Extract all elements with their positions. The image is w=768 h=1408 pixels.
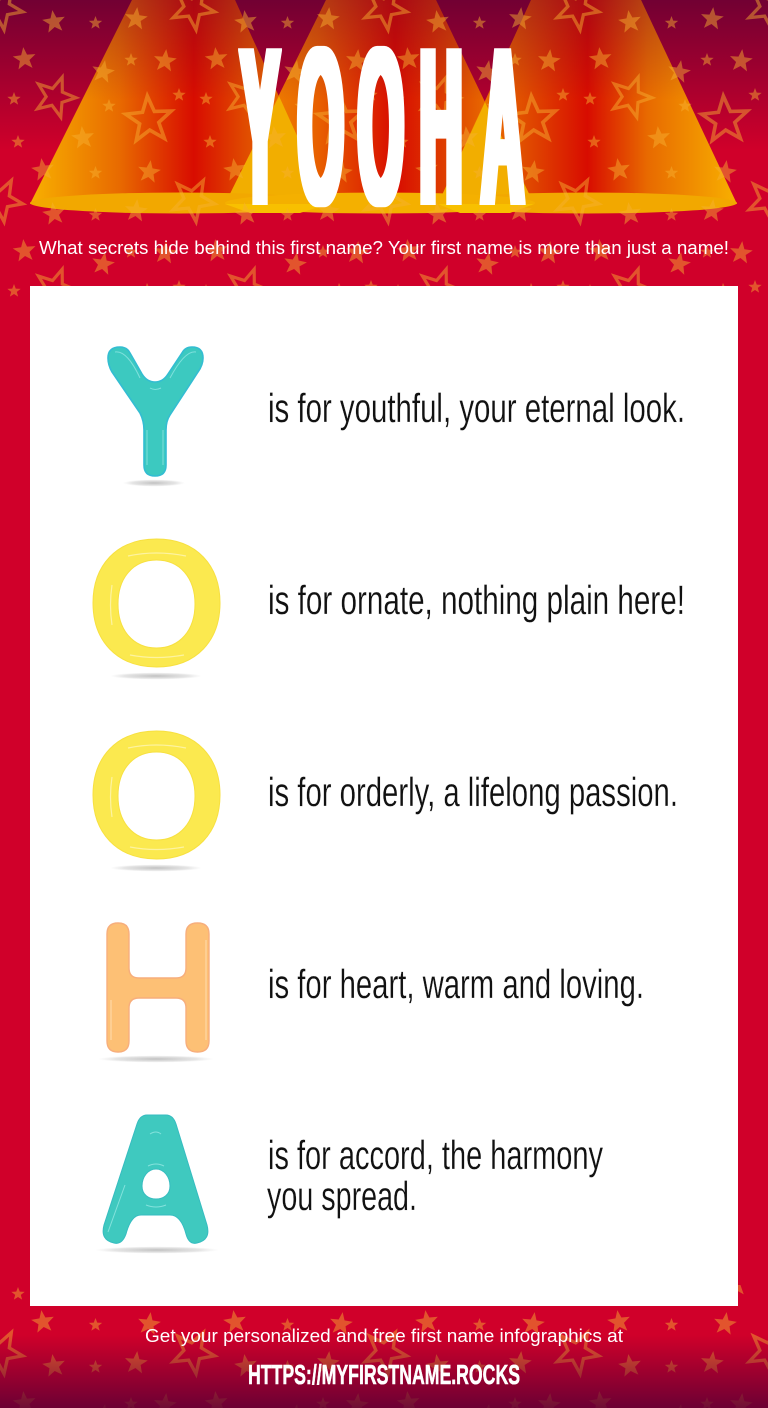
bottom shade	[0, 1335, 768, 1408]
icon: letter Y	[108, 347, 203, 486]
panel: letters	[30, 286, 738, 1306]
row: letter O	[93, 731, 678, 872]
footer url: HTTPS://MYFIRSTNAME.ROCKS	[248, 1359, 520, 1390]
icon: letter A	[95, 1115, 219, 1254]
subtitle: What secrets hide behind this first name? Your first name is more than just a name!	[39, 238, 729, 258]
row: letter Y	[108, 347, 685, 486]
spotlights	[0, 0, 768, 214]
icon: letter O	[93, 539, 220, 680]
row: letter H	[98, 923, 644, 1062]
row: letter O	[93, 539, 685, 680]
row: letter A	[95, 1115, 603, 1254]
icon: letter H	[98, 923, 214, 1062]
top shade	[0, 0, 768, 150]
title: YOOHA	[240, 0, 524, 252]
footer text: Get your personalized and free first name infographics at	[145, 1325, 623, 1346]
text: A	[267, 1132, 603, 1219]
text: A: you spread.	[267, 1173, 417, 1219]
icon: letter O	[93, 731, 220, 872]
text: A: is for accord, the harmony	[268, 1132, 603, 1178]
